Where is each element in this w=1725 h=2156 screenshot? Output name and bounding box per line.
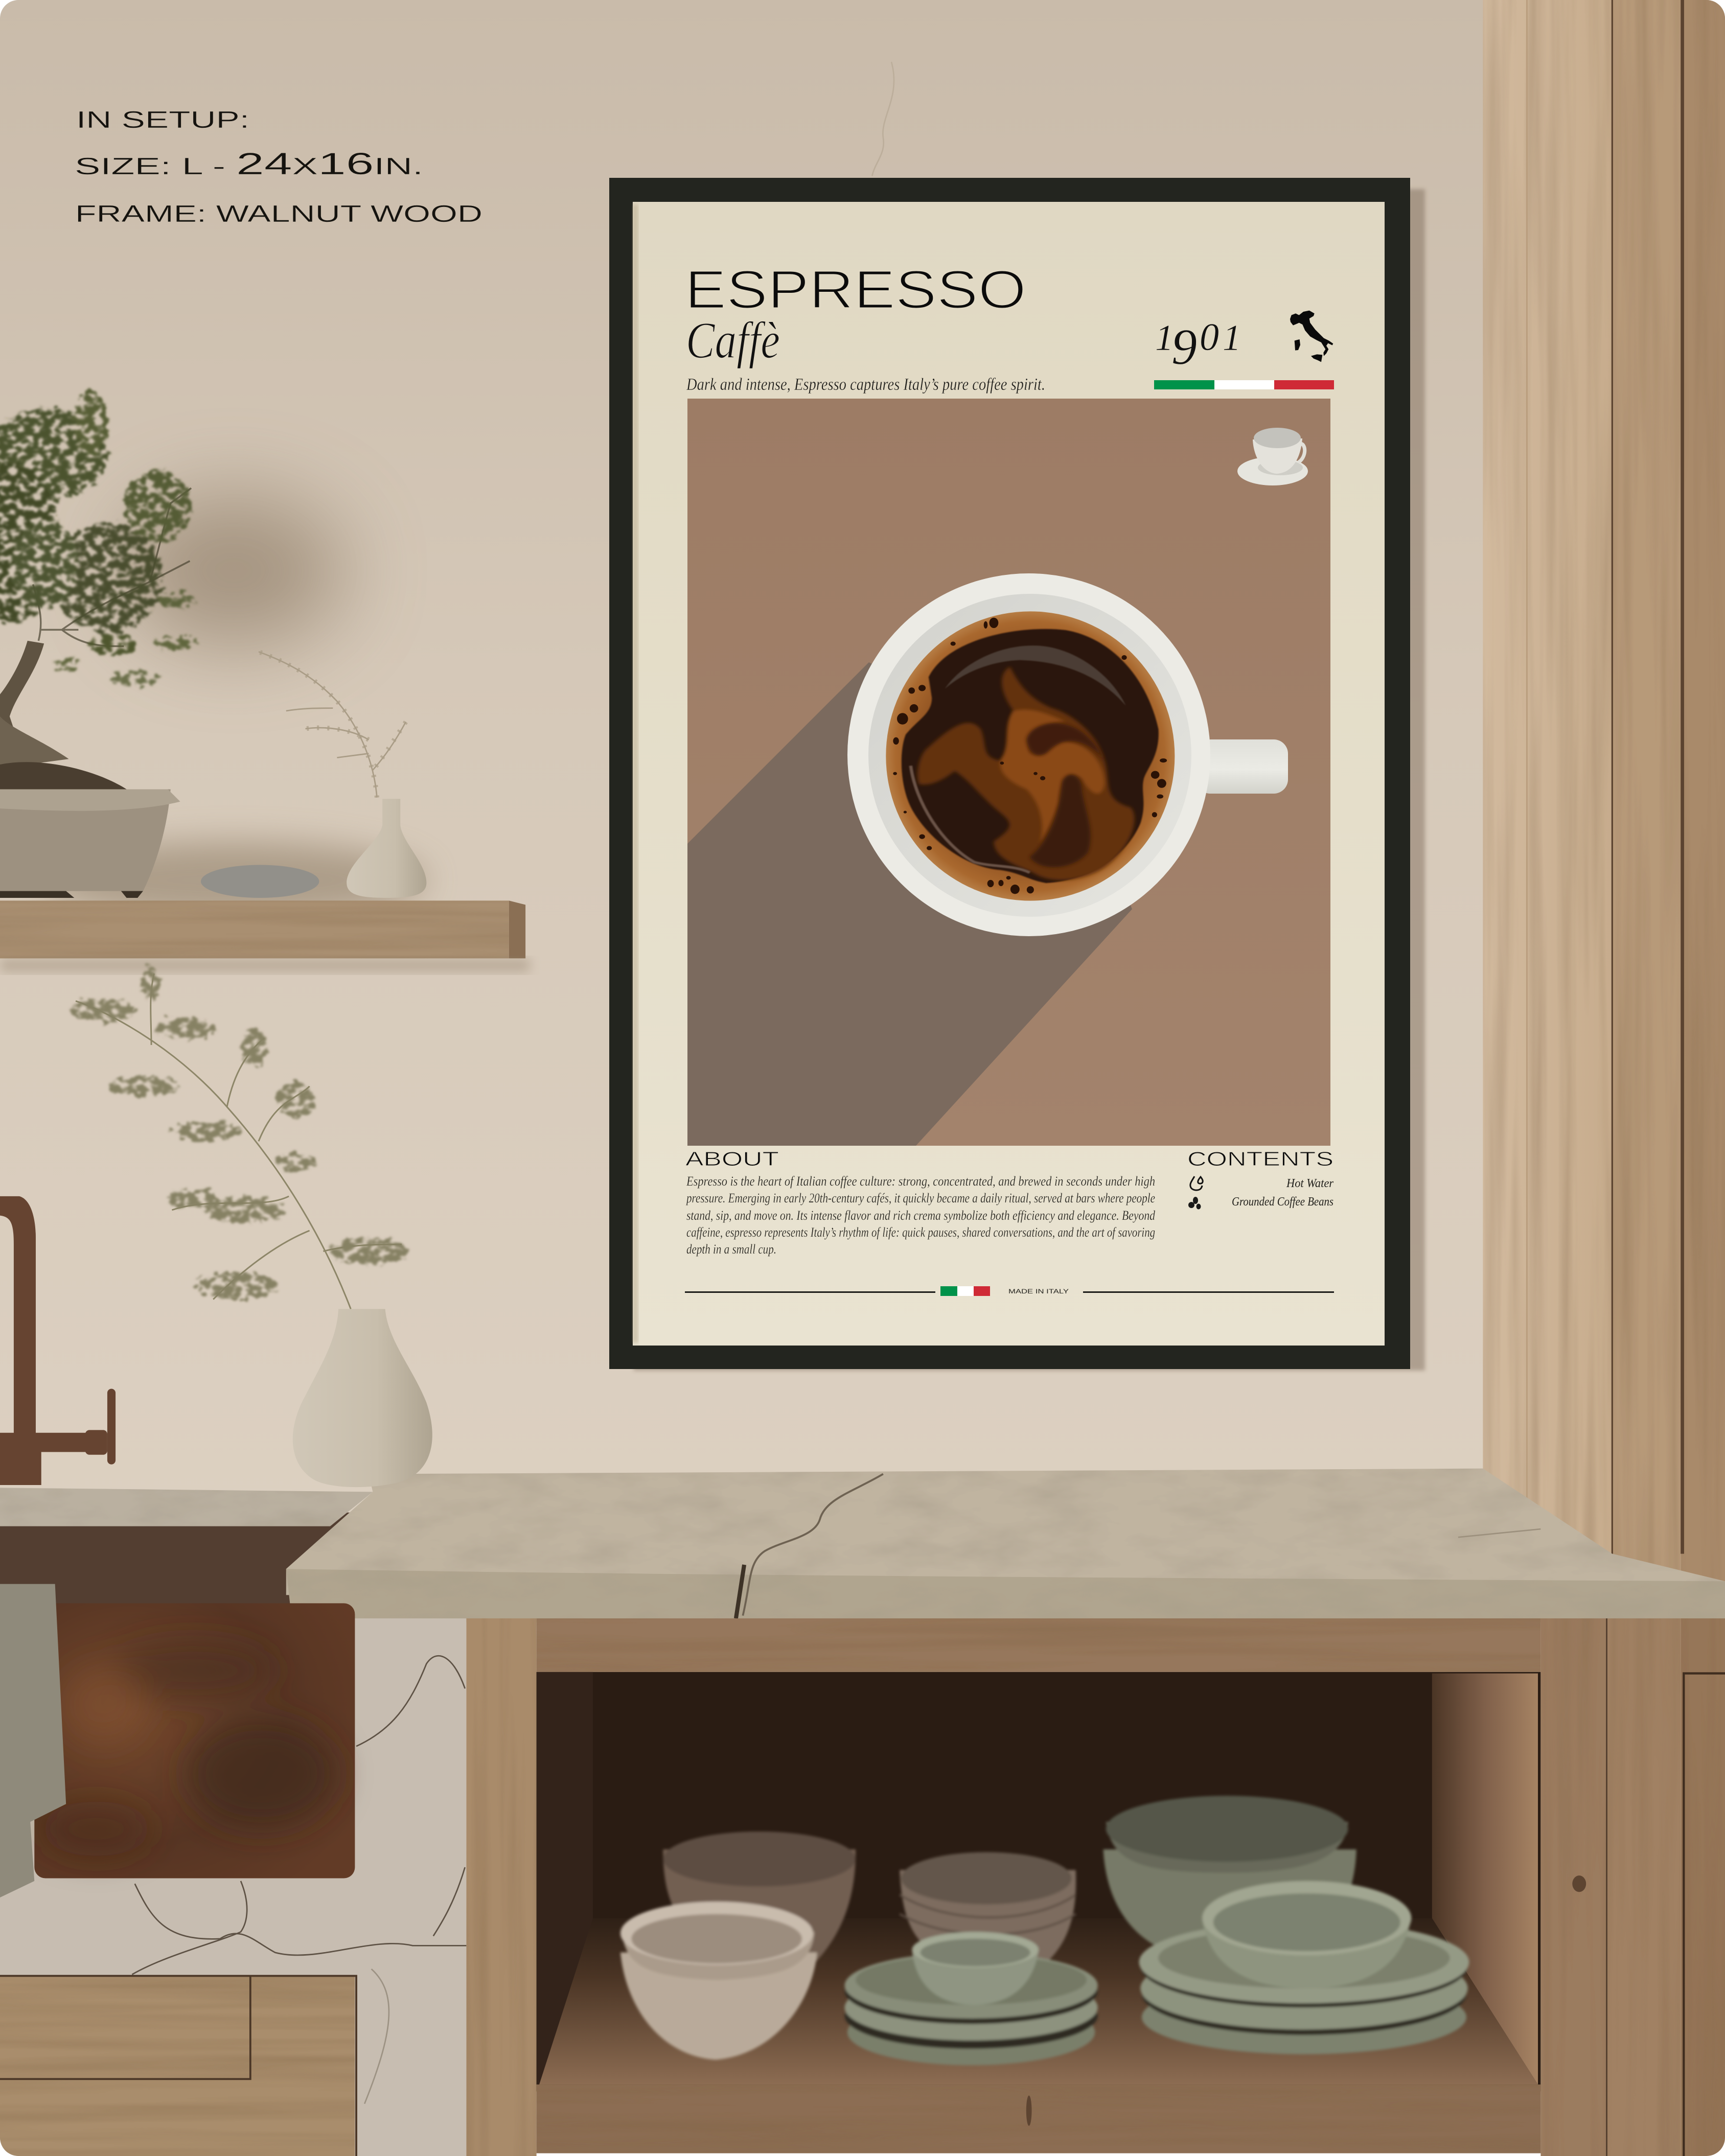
stone counter front edge — [286, 1569, 1725, 1618]
back right bowls — [1103, 1796, 1356, 1959]
interior back wall — [537, 1672, 1540, 2092]
right cabinet: light side panel — [1483, 0, 1725, 1595]
wall shadow above shelf — [41, 842, 426, 918]
cup outer rim — [847, 573, 1210, 936]
branches — [33, 488, 191, 646]
dark coffee — [902, 629, 1159, 883]
middle stacked bowls — [900, 1852, 1076, 1963]
long cup shadow — [687, 662, 1132, 1146]
sink rim — [0, 1488, 373, 1526]
large vase — [293, 1309, 432, 1487]
crema bubbles — [893, 618, 1167, 894]
left post — [466, 1618, 537, 2156]
setup details text — [75, 106, 482, 227]
mid swirl — [917, 666, 1135, 880]
soil — [0, 762, 127, 789]
about paragraph: Espresso is the heart of Italian coffee culture: strong, concentrated, and brewed in seconds under high — [686, 1174, 1155, 1189]
shadow under shelf — [0, 958, 530, 972]
icon: water drop — [1190, 1176, 1203, 1190]
back left bowls — [663, 1832, 856, 1966]
cup handle — [1298, 444, 1305, 462]
year: 9 — [1171, 318, 1197, 375]
door outline — [1684, 1674, 1725, 2156]
wall shelf — [0, 900, 525, 958]
right plates — [1139, 1921, 1469, 2054]
sink dark patches — [41, 1640, 337, 1856]
bottom rail — [537, 2084, 1540, 2153]
year: 1 — [1155, 317, 1174, 358]
tagline: Dark and intense, Espresso captures Italy’s pure coffee spirit. — [686, 375, 1045, 394]
bright swirl — [1000, 709, 1105, 844]
wall crack — [872, 62, 894, 176]
post seam — [1606, 1618, 1607, 2156]
cup handle — [1196, 739, 1288, 794]
coffee surface — [886, 611, 1175, 901]
title: espresso: ESPRESSO — [685, 260, 1026, 320]
about heading: ABOUT — [685, 1148, 779, 1170]
feathery leaf tufts — [70, 967, 407, 1300]
saucer shade — [1258, 460, 1303, 475]
footer right rule — [1083, 1291, 1334, 1293]
surface highlight — [945, 645, 1126, 706]
footer left rule — [685, 1291, 935, 1293]
illustration panel — [687, 399, 1330, 1146]
stone on shelf — [201, 865, 319, 898]
dark swirl upper — [1026, 723, 1105, 760]
about paragraph: pressure. Emerging in early 20th-century cafés, it quickly became a daily ritual, served at bars where people — [685, 1191, 1155, 1205]
panel background — [687, 399, 1330, 1146]
contents item: ground coffee: Grounded Coffee Beans — [1232, 1195, 1333, 1209]
size line: SIZE: L - 24 X 16 IN. — [75, 147, 423, 181]
drawer stile and rail lines — [0, 1976, 356, 2156]
about paragraph: stand, sip, and move on. Its intense flavor and rich crema symbolize both efficiency and elegance. Beyond — [686, 1208, 1156, 1223]
made in italy label: MADE IN ITALY — [1008, 1288, 1069, 1295]
interior right wall — [1432, 1674, 1538, 2084]
about paragraph — [685, 1174, 1156, 1257]
front left pale bowls — [620, 1902, 817, 2060]
subtitle: caffe: Caffè — [686, 312, 780, 369]
italian flag bar — [1154, 380, 1334, 389]
crema ring — [886, 611, 1175, 901]
sink back wall — [0, 1513, 360, 1606]
faucet — [0, 1196, 116, 1485]
rim reflection — [911, 766, 1030, 873]
stone counter top — [286, 1469, 1725, 1595]
wall shadow behind bonsai — [124, 495, 344, 646]
black frame — [609, 178, 1410, 1369]
bonsai tree — [0, 390, 199, 898]
contents item: hot water: Hot Water — [1286, 1177, 1334, 1190]
trunk — [0, 641, 44, 729]
paper — [633, 202, 1385, 1346]
year: 1 — [1223, 317, 1241, 358]
interior floor — [539, 1918, 1538, 2084]
counter cracks — [736, 1474, 1540, 1618]
footer flag — [940, 1286, 990, 1296]
small vase and twig — [259, 652, 426, 898]
pot rim — [0, 789, 180, 811]
copper sink front — [34, 1603, 355, 1878]
bowls and plates on shelf — [620, 1796, 1469, 2065]
about paragraph: caffeine, espresso represents Italy’s rhythm of life: quick pauses, shared conversations, and the art of savoring — [686, 1225, 1155, 1240]
middle plates — [845, 1953, 1098, 2065]
branch stems — [76, 973, 402, 1309]
right posts — [1540, 1618, 1725, 2156]
frame line: FRAME: WALNUT WOOD — [75, 200, 482, 227]
plaster under counter — [0, 1618, 466, 2156]
cup inner wall — [868, 594, 1191, 917]
in setup line: IN SETUP: — [76, 106, 249, 133]
frame drop shadow — [634, 189, 1425, 1371]
towel — [0, 1584, 66, 1897]
lower plant branches — [70, 967, 407, 1309]
cup body — [1253, 438, 1302, 474]
icon: small cup on saucer — [1237, 428, 1308, 485]
about paragraph: depth in a small cup. — [686, 1242, 776, 1257]
cup rim — [1254, 428, 1301, 448]
knots — [1026, 1875, 1586, 2126]
small green cup — [912, 1932, 1039, 2005]
interior left wall — [537, 1672, 593, 2092]
icon: italy map — [1290, 311, 1333, 362]
roots — [0, 716, 69, 764]
coffee cup top view — [847, 573, 1288, 936]
paper inner bevel — [633, 204, 638, 1343]
dark swirl channel — [1030, 775, 1091, 867]
plaster cracks — [132, 1656, 466, 2104]
wall — [0, 0, 1725, 1622]
saucer — [1237, 457, 1308, 485]
year: 0 — [1200, 316, 1219, 359]
pot body — [0, 789, 171, 891]
top rail — [537, 1618, 1540, 1672]
bottom left drawer — [0, 1976, 355, 2156]
icon: coffee beans — [1188, 1197, 1201, 1209]
framed poster — [609, 178, 1425, 1371]
pot feet — [0, 891, 143, 898]
contents heading: CONTENTS — [1187, 1148, 1333, 1170]
cabinet seam lines — [1527, 0, 1683, 1554]
open shelf cabinet — [466, 1618, 1725, 2156]
large green cup — [1202, 1881, 1411, 1988]
foliage — [0, 390, 199, 686]
